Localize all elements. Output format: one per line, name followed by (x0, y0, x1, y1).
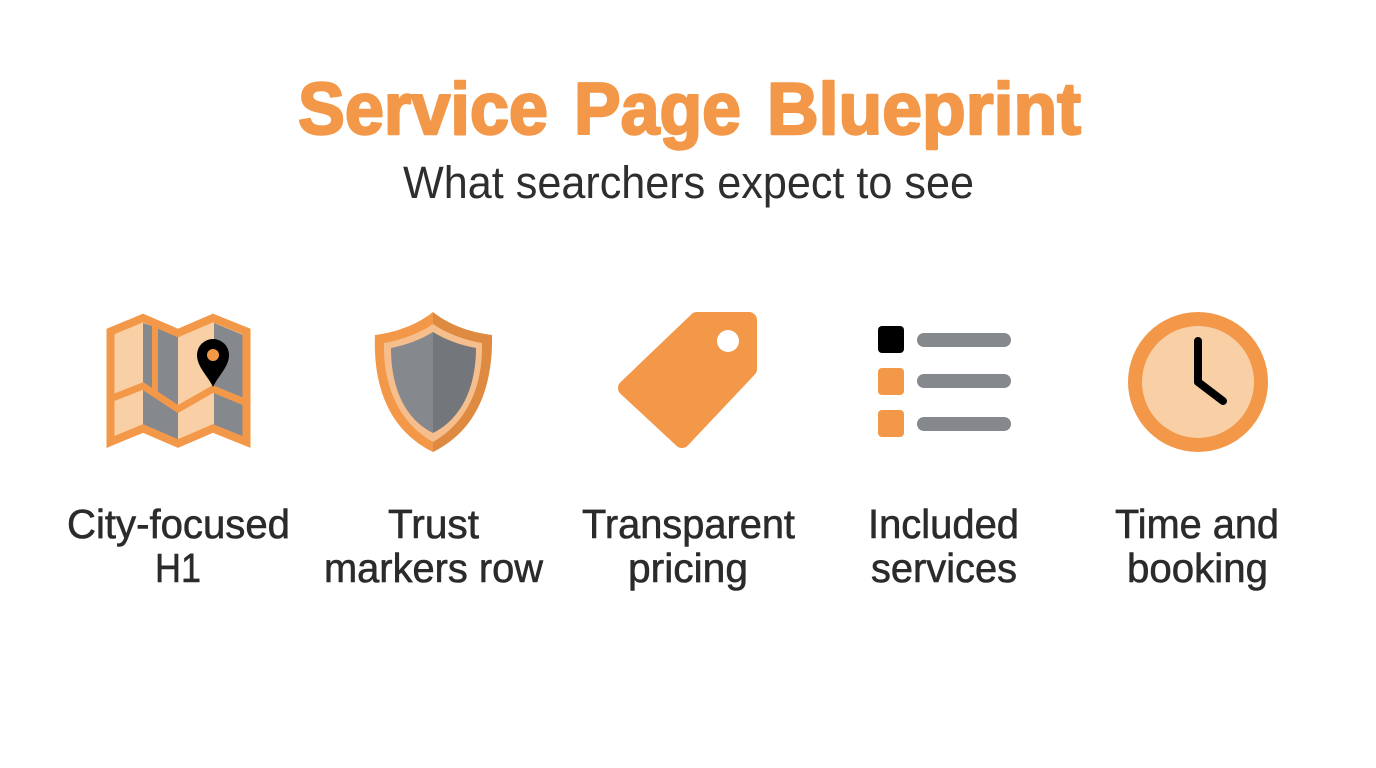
title: Service (298, 69, 548, 150)
icon: price tag (626, 320, 749, 440)
label: Trust markers row: markers row (324, 545, 543, 591)
icon: checklist (878, 326, 1011, 437)
label: Time and booking: booking (1127, 545, 1268, 591)
label: Included services (868, 501, 1019, 591)
label: Included services: services (871, 545, 1017, 591)
title (298, 69, 1081, 150)
title: Page (574, 69, 741, 150)
subtitle: What searchers expect to see (403, 157, 974, 208)
label: Transparent pricing: pricing (628, 545, 748, 591)
label: City-focused H1: City-focused (67, 501, 290, 547)
icon: clock (1128, 312, 1268, 452)
icon: shield (375, 312, 492, 452)
title: Blueprint (767, 69, 1081, 150)
label: Time and booking: Time and (1115, 501, 1279, 547)
label: Time and booking (1115, 501, 1279, 591)
label: City-focused H1 (67, 501, 290, 591)
icon: folded map with pin (109, 316, 248, 445)
label: Trust markers row (324, 501, 543, 591)
label: Included services: Included (868, 501, 1019, 547)
label: Transparent pricing: Transparent (582, 501, 796, 547)
label: Trust markers row: Trust (388, 501, 480, 547)
label: Transparent pricing (582, 501, 796, 591)
label: City-focused H1: H1 (155, 545, 201, 591)
